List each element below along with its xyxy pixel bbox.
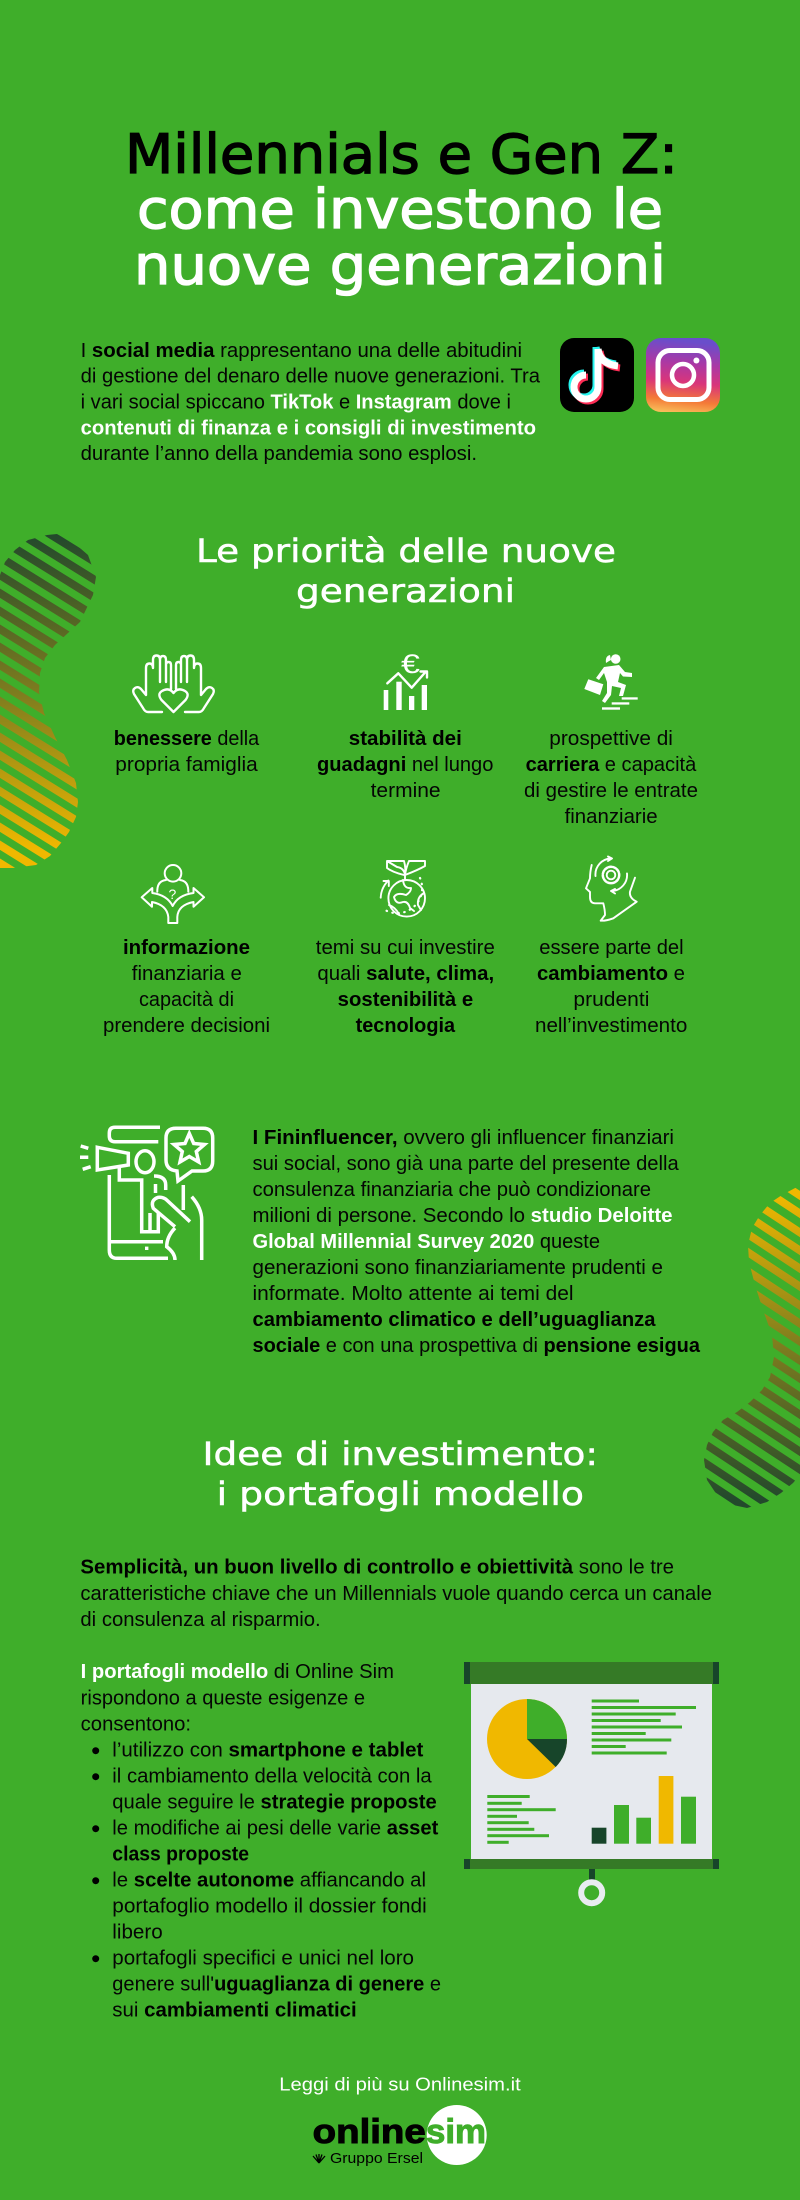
text block: Fininfluencer: Global Millennial Survey 2020 queste: [252, 1231, 600, 1253]
text: priorities row 2: quali salute, clima,: [317, 963, 494, 985]
intro text block: I social media rappresentano una delle abitudini: [81, 340, 522, 362]
text block: portfolio list: class proposte: [112, 1844, 249, 1866]
text: priorities row 2: temi su cui investire: [316, 937, 495, 959]
text block: Fininfluencer: generazioni sono finanziariamente prudenti e: [252, 1257, 663, 1279]
text: priorities row 1: benessere della: [114, 728, 260, 750]
text block: portfolio list: libero: [112, 1922, 163, 1944]
icon: globe with sprout: [381, 861, 425, 917]
heading: investment ideas: [202, 1435, 598, 1513]
text block: portfolio list: portafoglio modello il dossier fondi: [112, 1896, 427, 1918]
text block: portfolio list: le modifiche ai pesi delle varie asset: [112, 1818, 439, 1840]
intro text block: [81, 340, 541, 465]
bar chart: [592, 1776, 696, 1844]
intro text block: di gestione del denaro delle nuove generazioni. Tra: [81, 366, 541, 388]
text: priorities row 1: stabilità dei: [349, 728, 462, 750]
heading: investment ideas: i portafogli modello: [217, 1475, 584, 1513]
heading: investment ideas: Idee di investimento:: [202, 1435, 598, 1473]
text block: portfolio list: il cambiamento della velocità con la: [112, 1766, 433, 1788]
text: priorities row 1: guadagni nel lungo: [317, 754, 493, 776]
title: nuove generazioni: [134, 234, 666, 297]
intro text block: i vari social spiccano TikTok e Instagram dove i: [81, 392, 511, 414]
text: priorities row 2: finanziaria e: [132, 963, 242, 985]
footer link text: Leggi di più su Onlinesim.it: [279, 2075, 521, 2095]
text: priorities row 2: capacità di: [139, 989, 234, 1011]
icon: head with gear: [586, 856, 637, 921]
title: Millennials e Gen Z:: [125, 123, 678, 186]
text: priorities row 2: cambiamento e: [537, 963, 685, 985]
icon: businesswoman climbing stairs: [584, 654, 638, 710]
list bullets: [92, 1747, 99, 1962]
legend lines top: [592, 1700, 696, 1754]
icon: Instagram: [646, 338, 720, 412]
text block: portfolio list: rispondono a queste esigenze e: [81, 1688, 365, 1710]
text: priorities row 1: carriera e capacità: [526, 754, 697, 776]
logo: Online Sim: sim: [426, 2113, 486, 2151]
icon: person at crossroads: ?: [168, 886, 176, 902]
text block: portfolio list: sui cambiamenti climatici: [112, 2000, 357, 2022]
text: priorities row 1: [114, 728, 698, 828]
title: come investono le: [137, 178, 663, 241]
text: priorities row 1: propria famiglia: [115, 754, 259, 776]
text block: portfolio list: genere sull'uguaglianza di genere e: [112, 1974, 441, 1996]
text: priorities row 1: termine: [371, 780, 441, 802]
text block: Fininfluencer: informate. Molto attente ai temi del: [252, 1283, 574, 1305]
text block: portfolio list: portafogli specifici e unici nel loro: [112, 1948, 414, 1970]
icon: person at crossroads: [142, 865, 204, 923]
icon: finfluencer on smartphone: [80, 1127, 213, 1260]
intro text block: contenuti di finanza e i consigli di investimento: [81, 418, 536, 440]
intro text block: durante l’anno della pandemia sono esplosi.: [81, 443, 477, 465]
text: priorities row 1: di gestire le entrate: [524, 780, 698, 802]
text block: model portfolios intro: caratteristiche chiave che un Millennials vuole quando cerca un canale: [80, 1583, 712, 1605]
text block: Fininfluencer: milioni di persone. Secondo lo studio Deloitte: [252, 1205, 672, 1227]
text block: portfolio list: le scelte autonome affiancando al: [112, 1870, 426, 1892]
heading: priorities: Le priorità delle nuove: [196, 532, 616, 570]
text: priorities row 2: informazione: [123, 937, 250, 959]
text block: portfolio list: l’utilizzo con smartphone e tablet: [112, 1740, 424, 1762]
logo: Online Sim: Gruppo Ersel: [330, 2151, 423, 2167]
text: priorities row 2: prudenti: [573, 989, 649, 1011]
icon: euro growth chart: €: [401, 649, 420, 679]
text block: portfolio list: [81, 1661, 441, 2022]
text: priorities row 2: nell’investimento: [535, 1015, 687, 1037]
text block: Fininfluencer: sociale e con una prospettiva di pensione esigua: [252, 1335, 701, 1357]
pie chart: [487, 1699, 567, 1779]
text block: portfolio list: I portafogli modello di Online Sim: [81, 1661, 394, 1683]
text: priorities row 2: tecnologia: [356, 1015, 456, 1037]
illustration: presentation screen: [464, 1662, 719, 1903]
icon: hands with heart: [133, 656, 214, 712]
decorative striped blob: right: [704, 1188, 800, 1508]
text: priorities row 2: prendere decisioni: [103, 1015, 270, 1037]
text block: Fininfluencer: sui social, sono già una parte del presente della: [252, 1153, 680, 1175]
icon: euro growth chart: [384, 649, 427, 710]
text: priorities row 2: [103, 937, 687, 1037]
title: [125, 123, 678, 297]
text block: Fininfluencer: [252, 1127, 701, 1357]
text: priorities row 2: essere parte del: [539, 937, 684, 959]
text block: Fininfluencer: consulenza finanziaria che può condizionare: [252, 1179, 651, 1201]
heading: priorities: [196, 532, 616, 610]
text block: Fininfluencer: cambiamento climatico e dell’uguaglianza: [252, 1309, 656, 1331]
legend lines bottom: [487, 1795, 556, 1844]
icon: TikTok: [560, 338, 634, 412]
text block: portfolio list: quale seguire le strategie proposte: [112, 1792, 437, 1814]
logo: Online Sim: online: [313, 2113, 426, 2151]
text block: Fininfluencer: I Fininfluencer, ovvero gli influencer finanziari: [252, 1127, 674, 1149]
decorative striped blob: left: [0, 534, 96, 868]
text block: model portfolios intro: [80, 1556, 712, 1631]
text: priorities row 2: sostenibilità e: [338, 989, 473, 1011]
text: priorities row 1: prospettive di: [549, 728, 673, 750]
text block: model portfolios intro: Semplicità, un buon livello di controllo e obiettività sono le tre: [80, 1556, 674, 1578]
text block: model portfolios intro: di consulenza al risparmio.: [80, 1609, 321, 1631]
text: priorities row 1: finanziarie: [565, 806, 658, 828]
text block: portfolio list: consentono:: [81, 1714, 191, 1736]
heading: priorities: generazioni: [296, 572, 515, 610]
logo: Online Sim: [313, 2105, 487, 2167]
